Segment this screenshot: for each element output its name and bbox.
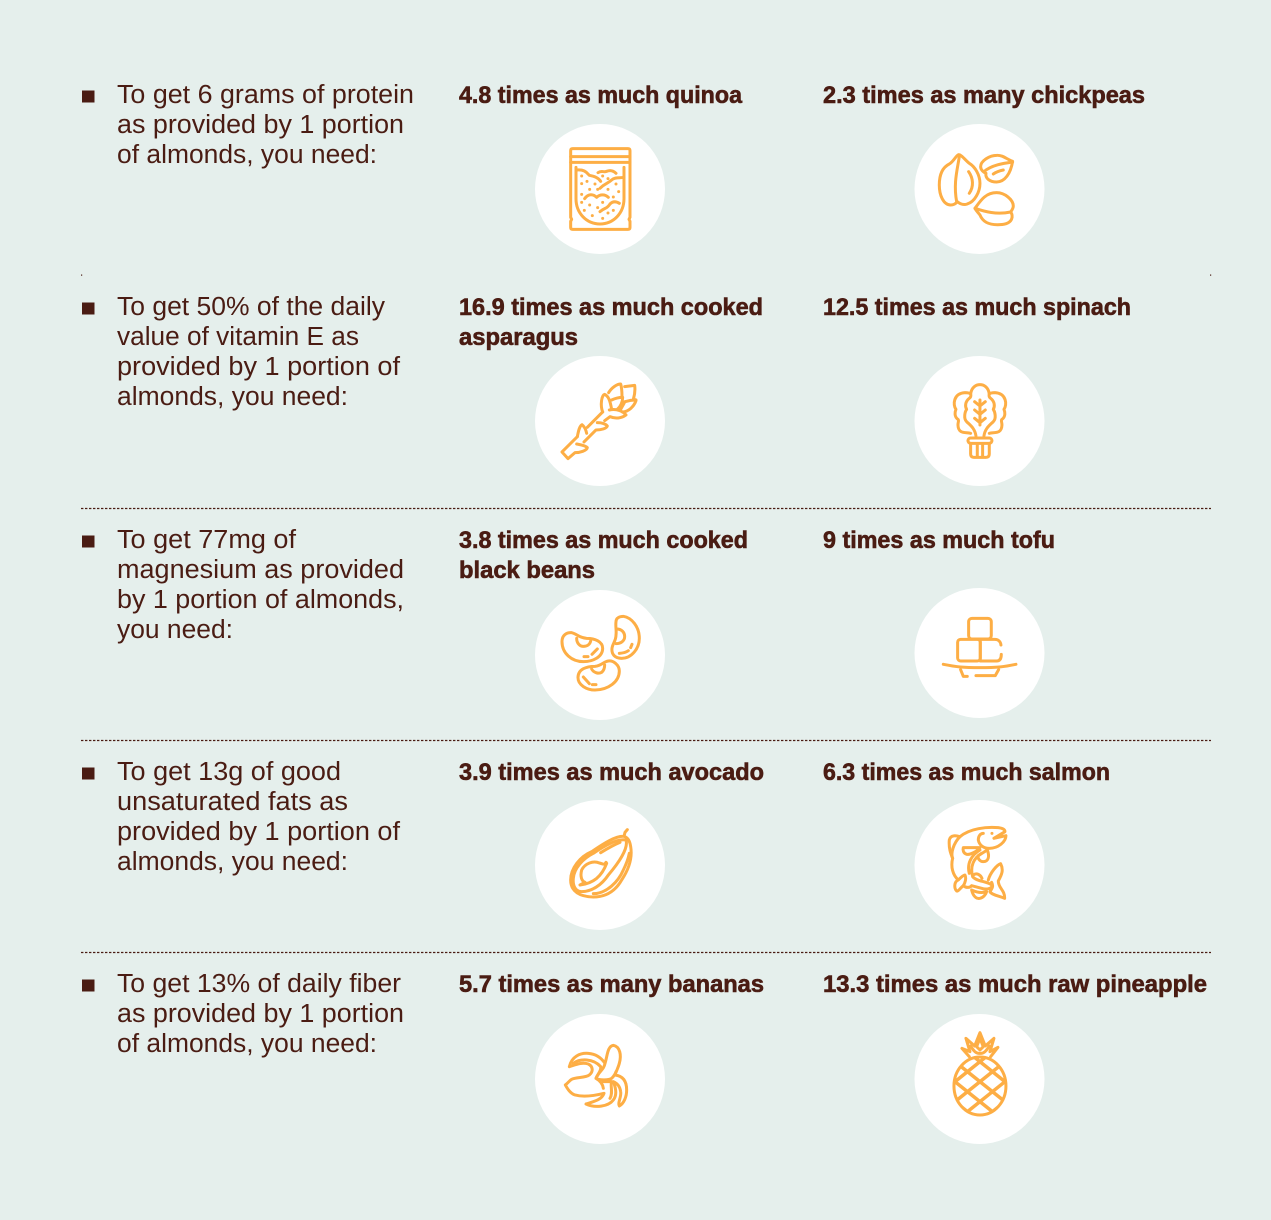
text: protein prompt: To get 6 grams of protein bbox=[117, 81, 414, 109]
heading: salmon: 6.3 times as much salmon bbox=[823, 759, 1110, 786]
heading: pineapple: 13.3 times as much raw pineapple bbox=[823, 971, 1207, 998]
icon: pineapple bbox=[914, 1014, 1044, 1148]
text: fats prompt: unsaturated fats as bbox=[117, 788, 348, 816]
text: fiber prompt: of almonds, you need: bbox=[117, 1030, 377, 1058]
text: vitamin E prompt: To get 50% of the daily bbox=[117, 293, 385, 321]
icon: avocado bbox=[535, 800, 665, 930]
icon: salmon bbox=[914, 800, 1044, 930]
icon: spinach bbox=[914, 356, 1044, 486]
bullet bbox=[82, 980, 94, 992]
text: fats prompt: almonds, you need: bbox=[117, 848, 348, 876]
row: vitamin E bbox=[82, 293, 1131, 486]
row: protein bbox=[82, 81, 1145, 254]
text: protein prompt bbox=[117, 81, 414, 169]
heading: black beans bbox=[459, 527, 748, 584]
text: protein prompt: as provided by 1 portion bbox=[117, 111, 404, 139]
text: magnesium prompt: by 1 portion of almonds, bbox=[117, 586, 404, 614]
icon: chickpeas bbox=[914, 124, 1044, 254]
heading: black beans: black beans bbox=[459, 557, 595, 584]
bullet bbox=[82, 768, 94, 780]
text: magnesium prompt: magnesium as provided bbox=[117, 556, 404, 584]
text: fats prompt: provided by 1 portion of bbox=[117, 818, 401, 846]
bullet bbox=[82, 90, 94, 102]
text: magnesium prompt: To get 77mg of bbox=[117, 526, 297, 554]
bullet bbox=[82, 302, 94, 314]
heading: asparagus bbox=[459, 294, 763, 351]
heading: avocado: 3.9 times as much avocado bbox=[459, 759, 764, 786]
heading: spinach: 12.5 times as much spinach bbox=[823, 294, 1131, 321]
icon: asparagus bbox=[535, 356, 665, 486]
heading: asparagus: asparagus bbox=[459, 324, 578, 351]
row: fiber bbox=[82, 970, 1207, 1148]
icon: black beans bbox=[535, 590, 665, 720]
text: fiber prompt: To get 13% of daily fiber bbox=[117, 970, 402, 998]
heading: tofu: 9 times as much tofu bbox=[823, 527, 1055, 554]
text: magnesium prompt bbox=[117, 526, 404, 644]
text: fats prompt: To get 13g of good bbox=[117, 758, 341, 786]
row: unsaturated fats bbox=[82, 758, 1110, 930]
text: fats prompt bbox=[117, 758, 401, 876]
icon: quinoa bag bbox=[535, 124, 665, 254]
icon: tofu bbox=[914, 588, 1044, 718]
text: magnesium prompt: you need: bbox=[117, 616, 233, 644]
heading: black beans: 3.8 times as much cooked bbox=[459, 527, 748, 554]
heading: asparagus: 16.9 times as much cooked bbox=[459, 294, 763, 321]
heading: quinoa: 4.8 times as much quinoa bbox=[459, 82, 743, 109]
text: fiber prompt bbox=[117, 970, 404, 1058]
text: fiber prompt: as provided by 1 portion bbox=[117, 1000, 404, 1028]
text: vitamin E prompt: almonds, you need: bbox=[117, 383, 348, 411]
bullet bbox=[82, 536, 94, 548]
text: vitamin E prompt: provided by 1 portion of bbox=[117, 353, 401, 381]
heading: chickpeas: 2.3 times as many chickpeas bbox=[823, 82, 1145, 109]
icon: banana bbox=[535, 1014, 665, 1144]
text: vitamin E prompt bbox=[117, 293, 401, 411]
heading: bananas: 5.7 times as many bananas bbox=[459, 971, 764, 998]
text: vitamin E prompt: value of vitamin E as bbox=[117, 323, 359, 351]
text: protein prompt: of almonds, you need: bbox=[117, 141, 377, 169]
row: magnesium bbox=[82, 526, 1055, 720]
